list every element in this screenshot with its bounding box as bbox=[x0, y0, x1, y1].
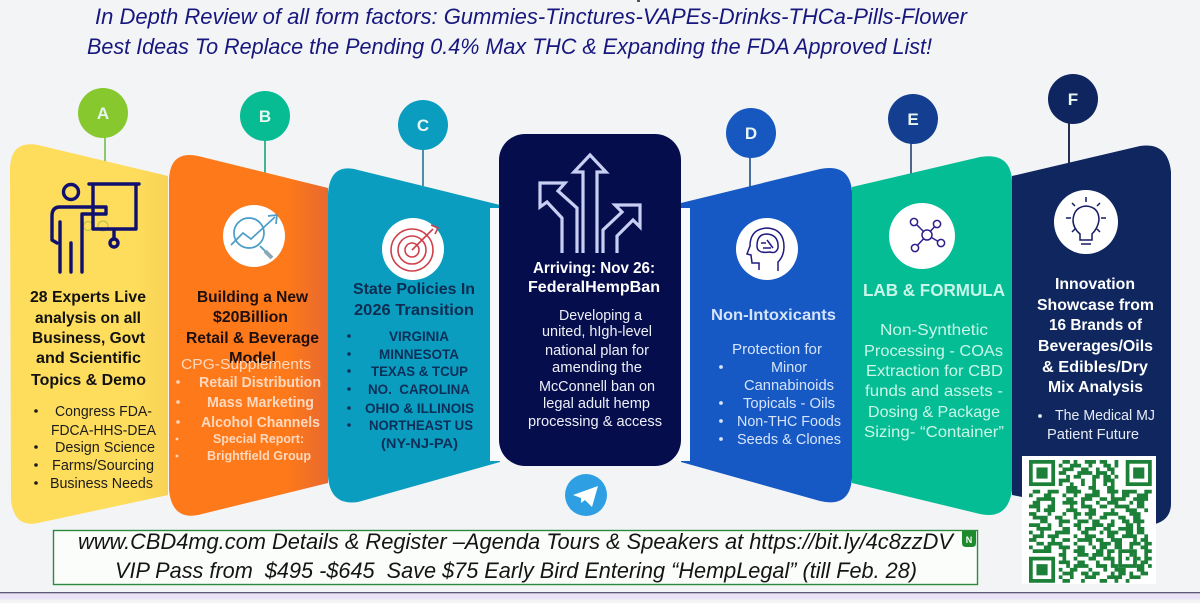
panel D list: Topicals - Oils bbox=[743, 396, 835, 412]
panel E body: Dosing & Package bbox=[868, 404, 1000, 421]
panel F list: The Medical MJ bbox=[1055, 408, 1155, 424]
panel B heading: Retail & Beverage bbox=[186, 330, 319, 347]
panel B list: Mass Marketing bbox=[207, 395, 314, 411]
panel D list: Minor bbox=[771, 360, 807, 376]
icon: diverging arrows bbox=[540, 155, 640, 253]
panel B list: Brightfield Group bbox=[207, 449, 311, 463]
panel C shape bbox=[328, 168, 500, 502]
panel F heading bbox=[1037, 276, 1154, 396]
badge D bbox=[726, 108, 776, 158]
badge C bbox=[398, 100, 448, 150]
panel D list: Cannabinoids bbox=[744, 378, 834, 394]
center body: McConnell ban on bbox=[539, 379, 655, 395]
icon: telegram bbox=[565, 474, 607, 516]
panel B text bbox=[176, 289, 321, 463]
panel C list: OHIO & ILLINOIS bbox=[365, 400, 474, 416]
badge A bbox=[78, 88, 128, 138]
panel E heading: LAB & FORMULA bbox=[863, 280, 1005, 300]
center body bbox=[528, 308, 662, 430]
panel A heading bbox=[30, 289, 146, 389]
panel C list: VIRGINIA bbox=[389, 328, 449, 344]
panel D shape bbox=[681, 168, 852, 502]
panel A shape bbox=[10, 144, 168, 524]
badge: N: N bbox=[966, 535, 972, 545]
center heading: FederalHempBan bbox=[528, 279, 660, 296]
panel B heading: Model bbox=[229, 350, 276, 367]
panel C heading bbox=[353, 281, 475, 319]
center panel text bbox=[528, 260, 662, 430]
panel C text bbox=[347, 281, 475, 451]
badge D: D bbox=[745, 124, 757, 143]
panel B list: Special Report: bbox=[213, 432, 304, 446]
panel C list: (NY-NJ-PA) bbox=[381, 435, 458, 451]
panel B heading: Building a New bbox=[197, 289, 309, 306]
panel B list: Retail Distribution bbox=[199, 375, 321, 391]
panel F text bbox=[1037, 276, 1155, 443]
badge: N bbox=[962, 531, 976, 547]
panel C heading: 2026 Transition bbox=[354, 302, 474, 319]
QR code bbox=[1022, 456, 1156, 584]
icon: molecule network bbox=[889, 203, 955, 269]
center heading: Arriving: Nov 26: bbox=[533, 260, 655, 277]
center body: amending the bbox=[552, 360, 642, 376]
panel F heading: 16 Brands of bbox=[1049, 317, 1143, 334]
panel B list: CPG-Supplements bbox=[181, 356, 311, 373]
connector lines bbox=[105, 115, 1069, 188]
badge F bbox=[1048, 74, 1098, 124]
panel F heading: Beverages/Oils bbox=[1038, 338, 1153, 355]
panel E text bbox=[863, 280, 1005, 441]
panel F heading: Mix Analysis bbox=[1048, 379, 1143, 396]
center body: Developing a bbox=[559, 308, 643, 324]
panel E body: Sizing- “Container” bbox=[864, 424, 1004, 441]
badge B: B bbox=[259, 107, 271, 126]
panel A heading: and Scientific bbox=[36, 350, 141, 367]
badge B bbox=[240, 91, 290, 141]
panel D list bbox=[719, 342, 841, 448]
panel C list bbox=[347, 328, 474, 451]
panel E body bbox=[864, 322, 1004, 441]
panel E body: Extraction for CBD bbox=[866, 363, 1003, 380]
badge A: A bbox=[97, 104, 109, 123]
center heading bbox=[528, 260, 660, 296]
panel E body: Non-Synthetic bbox=[880, 322, 988, 339]
panel D list: Seeds & Clones bbox=[737, 432, 841, 448]
panel E body: funds and assets - bbox=[865, 383, 1003, 400]
panel A list bbox=[34, 404, 156, 492]
badge E bbox=[888, 94, 938, 144]
panel C list: TEXAS & TCUP bbox=[371, 363, 468, 379]
panel D list: Protection for bbox=[732, 342, 822, 358]
panel A heading: Business, Govt bbox=[32, 330, 146, 347]
icon: magnifier chart bbox=[223, 205, 285, 267]
center body: national plan for bbox=[545, 343, 649, 359]
panel D heading: Non-Intoxicants bbox=[711, 307, 836, 324]
header text bbox=[87, 4, 968, 59]
icon: presenter bbox=[52, 184, 139, 272]
badge F: F bbox=[1068, 90, 1078, 109]
panel B heading bbox=[186, 289, 319, 367]
icon: target bbox=[382, 218, 444, 280]
panel F list bbox=[1038, 408, 1155, 443]
icon: light bulb bbox=[1054, 190, 1118, 254]
panel A heading: 28 Experts Live bbox=[30, 289, 146, 306]
panel A list: Farms/Sourcing bbox=[52, 458, 154, 474]
panel B list bbox=[176, 356, 321, 463]
badge C: C bbox=[417, 116, 429, 135]
footer box: www.CBD4mg.com Details & Register –Agenda Tours & Speakers at https://bit.ly/4c8zzDV bbox=[78, 529, 955, 554]
center panel bbox=[499, 134, 681, 466]
panel A text bbox=[30, 289, 156, 492]
panel D text bbox=[711, 307, 841, 448]
panel A list: Business Needs bbox=[50, 476, 153, 492]
panel F heading: Innovation bbox=[1055, 276, 1135, 293]
panel B list: Alcohol Channels bbox=[201, 415, 320, 431]
panel E body: Processing - COAs bbox=[864, 343, 1003, 360]
panel A heading: Topics & Demo bbox=[31, 372, 146, 389]
bottom divider band bbox=[0, 592, 1200, 599]
center body: processing & access bbox=[528, 414, 662, 430]
footer box: VIP Pass from $495 -$645 Save $75 Early Bird Entering “HempLegal” (till Feb. 28) bbox=[115, 558, 917, 583]
panel F list: Patient Future bbox=[1047, 427, 1139, 443]
panel F shape bbox=[1012, 146, 1171, 524]
panel D list: Non-THC Foods bbox=[737, 414, 841, 430]
icon: head with brain bbox=[736, 218, 798, 280]
panel C list: NORTHEAST US bbox=[369, 417, 473, 433]
panel B shape bbox=[169, 155, 328, 516]
panel A list: Congress FDA- bbox=[55, 404, 152, 420]
panel B heading: $20Billion bbox=[213, 309, 288, 326]
panel A heading: analysis on all bbox=[35, 310, 141, 327]
panel A list: Design Science bbox=[55, 440, 155, 456]
center body: united, hIgh-level bbox=[542, 324, 652, 340]
panel A list: FDCA-HHS-DEA bbox=[51, 423, 156, 439]
header text: In Depth Review of all form factors: Gummies-Tinctures-VAPEs-Drinks-THCa-Pills-Flower bbox=[95, 4, 968, 29]
badge E: E bbox=[907, 110, 919, 129]
panel E shape bbox=[852, 156, 1012, 515]
center body: legal adult hemp bbox=[543, 396, 650, 412]
panel C heading: State Policies In bbox=[353, 281, 475, 298]
white backing behind center panel bbox=[490, 208, 690, 461]
panel F heading: & Edibles/Dry bbox=[1042, 359, 1148, 376]
panel F heading: Showcase from bbox=[1037, 297, 1154, 314]
panel C list: NO. CAROLINA bbox=[368, 381, 470, 397]
panel C list: MINNESOTA bbox=[379, 346, 459, 362]
header text: Best Ideas To Replace the Pending 0.4% Max THC & Expanding the FDA Approved List! bbox=[87, 34, 933, 59]
footer box bbox=[54, 529, 978, 584]
